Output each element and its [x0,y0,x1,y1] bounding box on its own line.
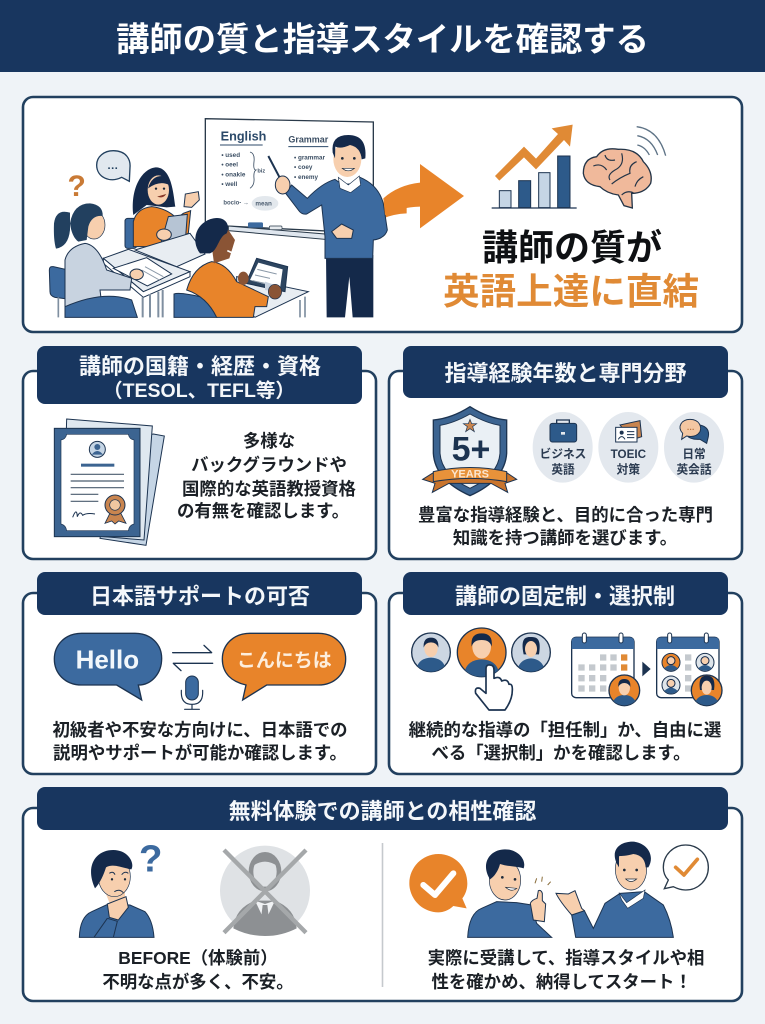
illustrations: Japanese support [54,633,346,709]
icon: pointer hand [475,665,512,710]
text: experience: 豊富な指導経験と、目的に合った専門 [418,505,713,525]
whiteboard: • onakle [221,171,246,178]
whiteboard: biz [257,168,265,174]
whiteboard: English [221,130,266,144]
arrow: calendar change [642,662,651,676]
heading: experience [403,346,728,398]
text: qualifications: バックグラウンドや [191,455,347,475]
text: before trial: BEFORE（体験前） [118,948,278,968]
avatar: teacher 3 [512,633,550,672]
speech bubble: Hello [54,633,162,700]
whiteboard: • used [221,152,240,159]
panel: Japanese support [23,593,376,774]
tables [103,233,308,317]
illustrations: after trial [409,842,708,937]
text: after trial: 実際に受講して、指導スタイルや相 [428,948,704,968]
panel: experience [389,371,742,559]
text: before trial [102,948,294,992]
whiteboard: mean [255,200,272,207]
whiteboard: • enemy [294,174,319,181]
crossed-out teacher silhouette [220,846,310,936]
whiteboard: • grammar [294,155,326,162]
text: qualifications: の有無を確認します。 [177,501,349,521]
arrows: exchange [173,645,213,671]
badge: 5+ years [423,407,517,496]
specialty: business: 英語 [551,462,575,476]
whiteboard: • well [221,181,238,188]
icon: question mark: ? [139,838,162,881]
arrow: classroom to results [383,164,464,228]
specialty: daily conversation [664,412,724,483]
text: after trial: 性を確かめ、納得してスタート！ [432,972,692,992]
text: Japanese support [52,720,348,763]
heading: fixed or selectable teacher [403,572,728,615]
panel: free trial [23,808,742,1001]
heading: free trial [37,787,728,830]
panel: hero [23,97,742,332]
calendar: after [657,633,722,706]
text: Japanese support: 説明やサポートが可能か確認します。 [53,743,347,763]
left student [49,203,172,317]
specialty: TOEIC: 対策 [617,462,640,476]
bubble dots: … [107,160,118,172]
whiteboard: bocio- → [223,200,249,206]
back student [125,167,199,248]
speech bubble: Konnichiwa: こんにちは [237,651,332,672]
text: experience: 知識を持つ講師を選びます。 [453,528,677,548]
illustrations: before trial [79,838,310,937]
heading: free trial: 無料体験での講師との相性確認 [229,799,536,824]
teacher gesturing [556,842,673,937]
avatar: teacher 2 selected [457,628,506,677]
illustration: growth chart and brain [383,125,666,228]
hero headline: 英語上達に直結 [443,271,699,312]
icon: question mark: ? [68,170,86,203]
heading: qualifications: （TESOL、TEFL等） [103,380,295,402]
whiteboard: • oeel [221,162,238,169]
student with thumbs up [468,849,552,937]
front student [174,218,288,317]
chart: rising bars [492,156,577,208]
illustrations: teacher selection [412,628,722,710]
specialty: business [533,412,593,483]
whiteboard: • coey [294,164,313,171]
text: qualifications [177,431,357,521]
text: teacher selection: べる「選択制」かを確認します。 [431,743,691,763]
divider [382,843,384,987]
icon: brain [583,127,666,208]
avatar: teacher 1 [412,633,450,672]
panel: qualifications [23,371,376,559]
icon: microphone [181,676,203,709]
whiteboard [205,119,373,239]
heading: qualifications: 講師の国籍・経歴・資格 [79,354,321,379]
text: teacher selection [409,720,722,763]
text: qualifications: 国際的な英語教授資格 [182,479,357,499]
specialty: daily conversation: … [687,423,695,432]
speech bubble: Hello: Hello [76,644,139,674]
heading: Japanese support [37,572,362,615]
icon: thought bubble [97,151,130,181]
text: before trial: 不明な点が多く、不安。 [102,972,294,992]
badge: 5+ years: 5+ [452,430,490,468]
panel: fixed or selectable teacher [389,593,742,774]
text: after trial [428,948,704,992]
heading: qualifications [37,346,362,404]
icon: certificate [54,419,164,545]
calendar: before [572,633,640,706]
title banner [0,0,765,72]
whiteboard: Grammar [288,134,329,144]
text: teacher selection: 継続的な指導の「担任制」か、自由に選 [409,720,722,740]
title banner: 講師の質と指導スタイルを確認する [116,22,649,59]
heading: Japanese support: 日本語サポートの可否 [90,584,310,609]
icon: white check bubble [663,845,708,890]
hero headline [443,227,699,312]
arrow: orange to results [382,190,407,218]
teacher [268,135,387,317]
arrow: trend [495,125,573,181]
specialty: TOEIC: TOEIC [611,448,647,461]
text: experience [418,505,713,548]
thinking person [79,850,154,937]
specialty: business: ビジネス [540,447,586,461]
text: qualifications: 多様な [243,431,295,451]
heading: experience: 指導経験年数と専門分野 [444,361,687,386]
badge: 5+ years: YEARS [451,469,489,481]
hero headline: 講師の質が [482,227,662,268]
illustration: classroom [49,119,407,317]
specialty: daily conversation: 英会話 [677,462,712,476]
speech bubble: Konnichiwa [222,633,346,700]
specialty: TOEIC [598,412,658,483]
heading: fixed or selectable teacher: 講師の固定制・選択制 [455,584,675,609]
specialty: daily conversation: 日常 [682,447,706,461]
text: Japanese support: 初級者や不安な方向けに、日本語での [52,720,348,740]
icon: orange check bubble [409,854,467,912]
illustrations: experience [423,407,724,496]
